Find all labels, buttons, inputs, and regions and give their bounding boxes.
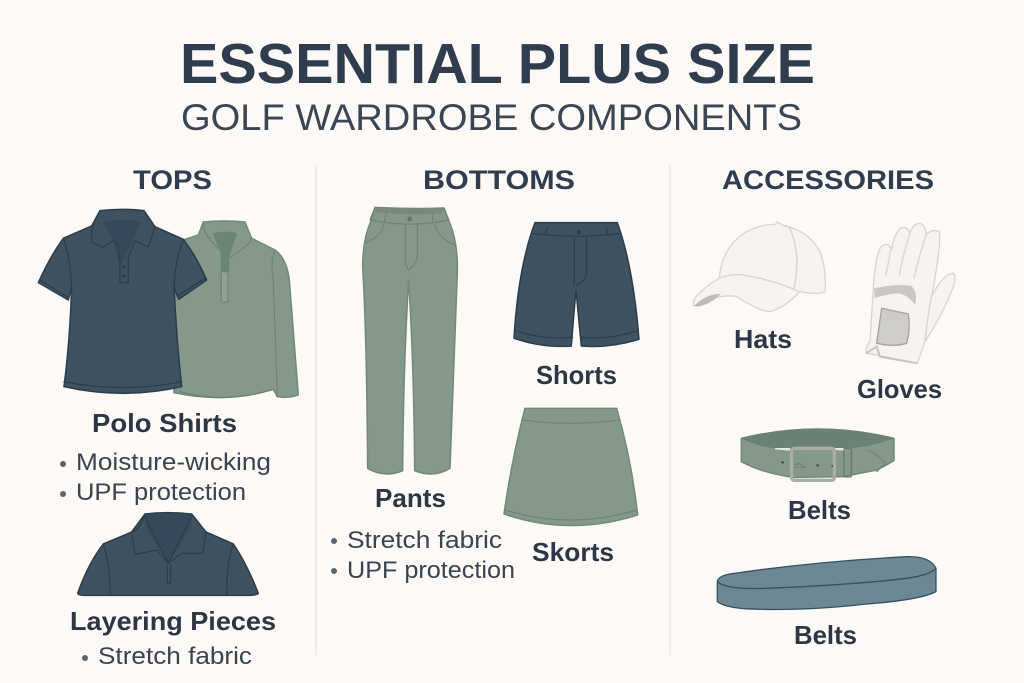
label: belts (second): Belts (794, 620, 857, 650)
icon: green pullover (174, 221, 298, 398)
panel: bottoms (331, 165, 639, 584)
bullet list: pants features (331, 527, 515, 584)
label: polo shirts: Polo Shirts (92, 408, 237, 438)
label: shorts: Shorts (536, 360, 617, 390)
label: pants: Pants (375, 483, 446, 513)
bullet: stretch fabric: Stretch fabric (98, 643, 252, 670)
bullet list: polo features: UPF protection (76, 479, 246, 506)
icon: navy shorts (514, 223, 639, 346)
icon: green pants (363, 207, 457, 474)
title: ESSENTIAL PLUS SIZE (180, 32, 815, 96)
label: hats: Hats (734, 324, 792, 354)
heading: bottoms: BOTTOMS (423, 165, 575, 195)
label: belts: Belts (788, 495, 851, 525)
heading: accessories: ACCESSORIES (722, 165, 934, 195)
bullet list: polo features (60, 449, 271, 506)
icon: navy polo shirt (38, 209, 207, 393)
icon: navy layering piece (78, 513, 258, 595)
label: gloves: Gloves (857, 374, 942, 404)
bullet list: pants features: Stretch fabric (347, 527, 502, 554)
panel: tops (38, 165, 298, 670)
title: GOLF WARDROBE COMPONENTS (181, 97, 802, 138)
icon: white cap (693, 222, 825, 312)
icon: blue belt (717, 557, 936, 609)
title (180, 32, 815, 138)
label: layering pieces: Layering Pieces (70, 606, 276, 636)
label: skorts: Skorts (532, 537, 614, 567)
bullet list: pants features: UPF protection (347, 557, 515, 584)
icon: green belt (741, 428, 894, 480)
heading: tops: TOPS (133, 165, 212, 195)
bullet list: polo features: Moisture-wicking (76, 449, 271, 476)
icon: green skort (504, 408, 638, 526)
panel: accessories (693, 165, 955, 650)
icon: white glove (866, 223, 955, 363)
